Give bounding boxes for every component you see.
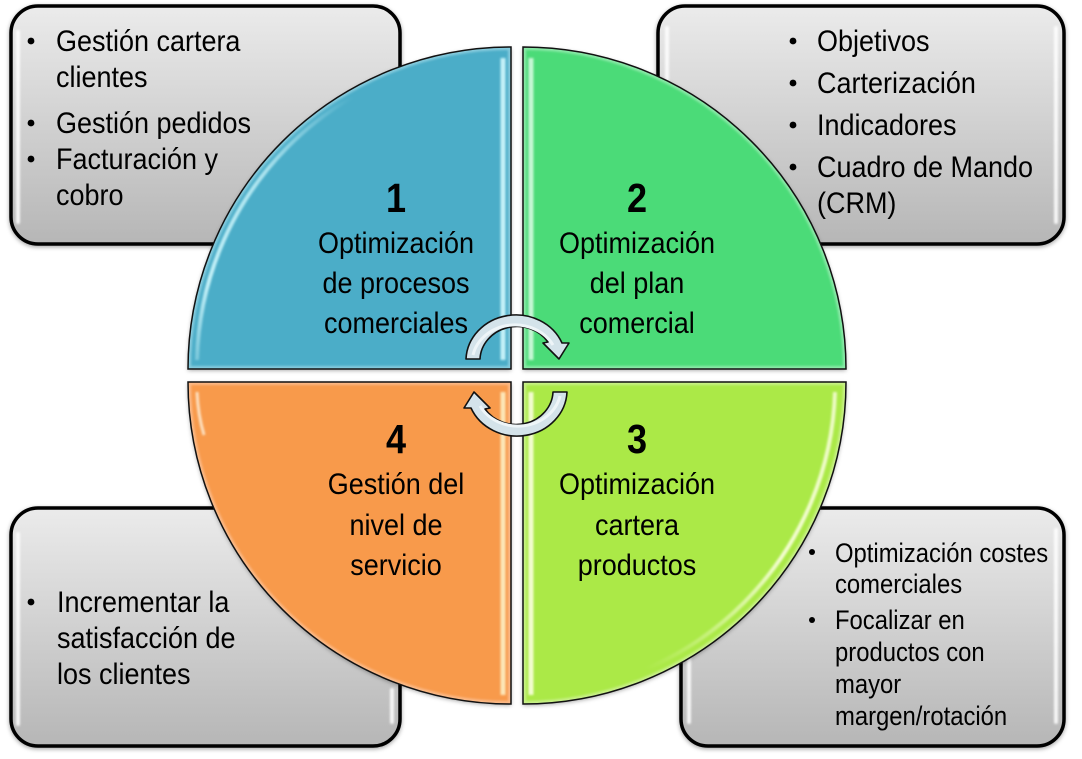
label: quadrant 1 text: comerciales [324, 307, 468, 340]
panel: top-left box [11, 6, 400, 244]
label: quadrant 2 text: comercial [579, 307, 695, 340]
label: quadrant 1 text: Optimización [318, 227, 474, 260]
label: quadrant 1 text: de procesos [323, 267, 469, 300]
text: process bullets [28, 25, 251, 212]
panel: top-right box [658, 6, 1064, 244]
label: quadrant 2 text [559, 176, 715, 340]
text: service bullet: satisfacción de [57, 622, 235, 655]
label: quadrant 4 text: nivel de [350, 509, 442, 542]
panel: quadrant 3 lime [523, 382, 846, 704]
label: quadrant 2 text: Optimización [559, 227, 715, 260]
text: product bullets: Focalizar en [835, 606, 965, 635]
label: quadrant 1 text [318, 176, 474, 340]
text: plan bullets: Indicadores [817, 109, 956, 142]
label: quadrant 4 text: 4 [386, 417, 407, 463]
text: process bullets: cobro [56, 179, 123, 212]
arrow: top clockwise [466, 315, 569, 359]
label: quadrant 1 text: 1 [386, 176, 406, 222]
label: quadrant 3 text: productos [578, 549, 696, 582]
panel: bottom-left box [11, 508, 400, 746]
text: product bullets: margen/rotación [835, 702, 1007, 731]
text: process bullets: Gestión cartera [56, 25, 241, 58]
text: product bullets [809, 539, 1048, 731]
label: quadrant 3 text: 3 [627, 417, 647, 463]
panel: bottom-right box [681, 508, 1064, 746]
label: quadrant 4 text: servicio [350, 549, 442, 582]
text: product bullets: Optimización costes [835, 539, 1048, 568]
label: quadrant 2 text: 2 [627, 176, 647, 222]
label: quadrant 3 text: Optimización [559, 468, 715, 501]
label: quadrant 2 text: del plan [590, 267, 684, 300]
text: service bullet [28, 586, 235, 691]
text: product bullets: comerciales [835, 570, 962, 599]
text: product bullets: mayor [835, 670, 901, 699]
text: process bullets: Gestión pedidos [56, 107, 251, 140]
text: plan bullets [790, 25, 1033, 220]
text: plan bullets: Cuadro de Mando [817, 151, 1033, 184]
text: service bullet: los clientes [57, 658, 190, 691]
panel: quadrant 1 blue [188, 47, 511, 369]
text: plan bullets: Objetivos [817, 25, 929, 58]
text: product bullets: productos con [835, 638, 985, 667]
text: plan bullets: Carterización [817, 67, 976, 100]
label: quadrant 3 text: cartera [595, 509, 679, 542]
panel: quadrant 4 orange [188, 382, 511, 704]
arrow: bottom clockwise [464, 392, 567, 436]
text: service bullet: Incrementar la [57, 586, 230, 619]
label: quadrant 4 text [328, 417, 464, 582]
text: process bullets: Facturación y [56, 143, 219, 176]
label: quadrant 4 text: Gestión del [328, 468, 464, 501]
text: plan bullets: (CRM) [817, 187, 896, 220]
panel: quadrant 2 green [523, 47, 846, 369]
text: process bullets: clientes [56, 61, 147, 94]
label: quadrant 3 text [559, 417, 715, 582]
